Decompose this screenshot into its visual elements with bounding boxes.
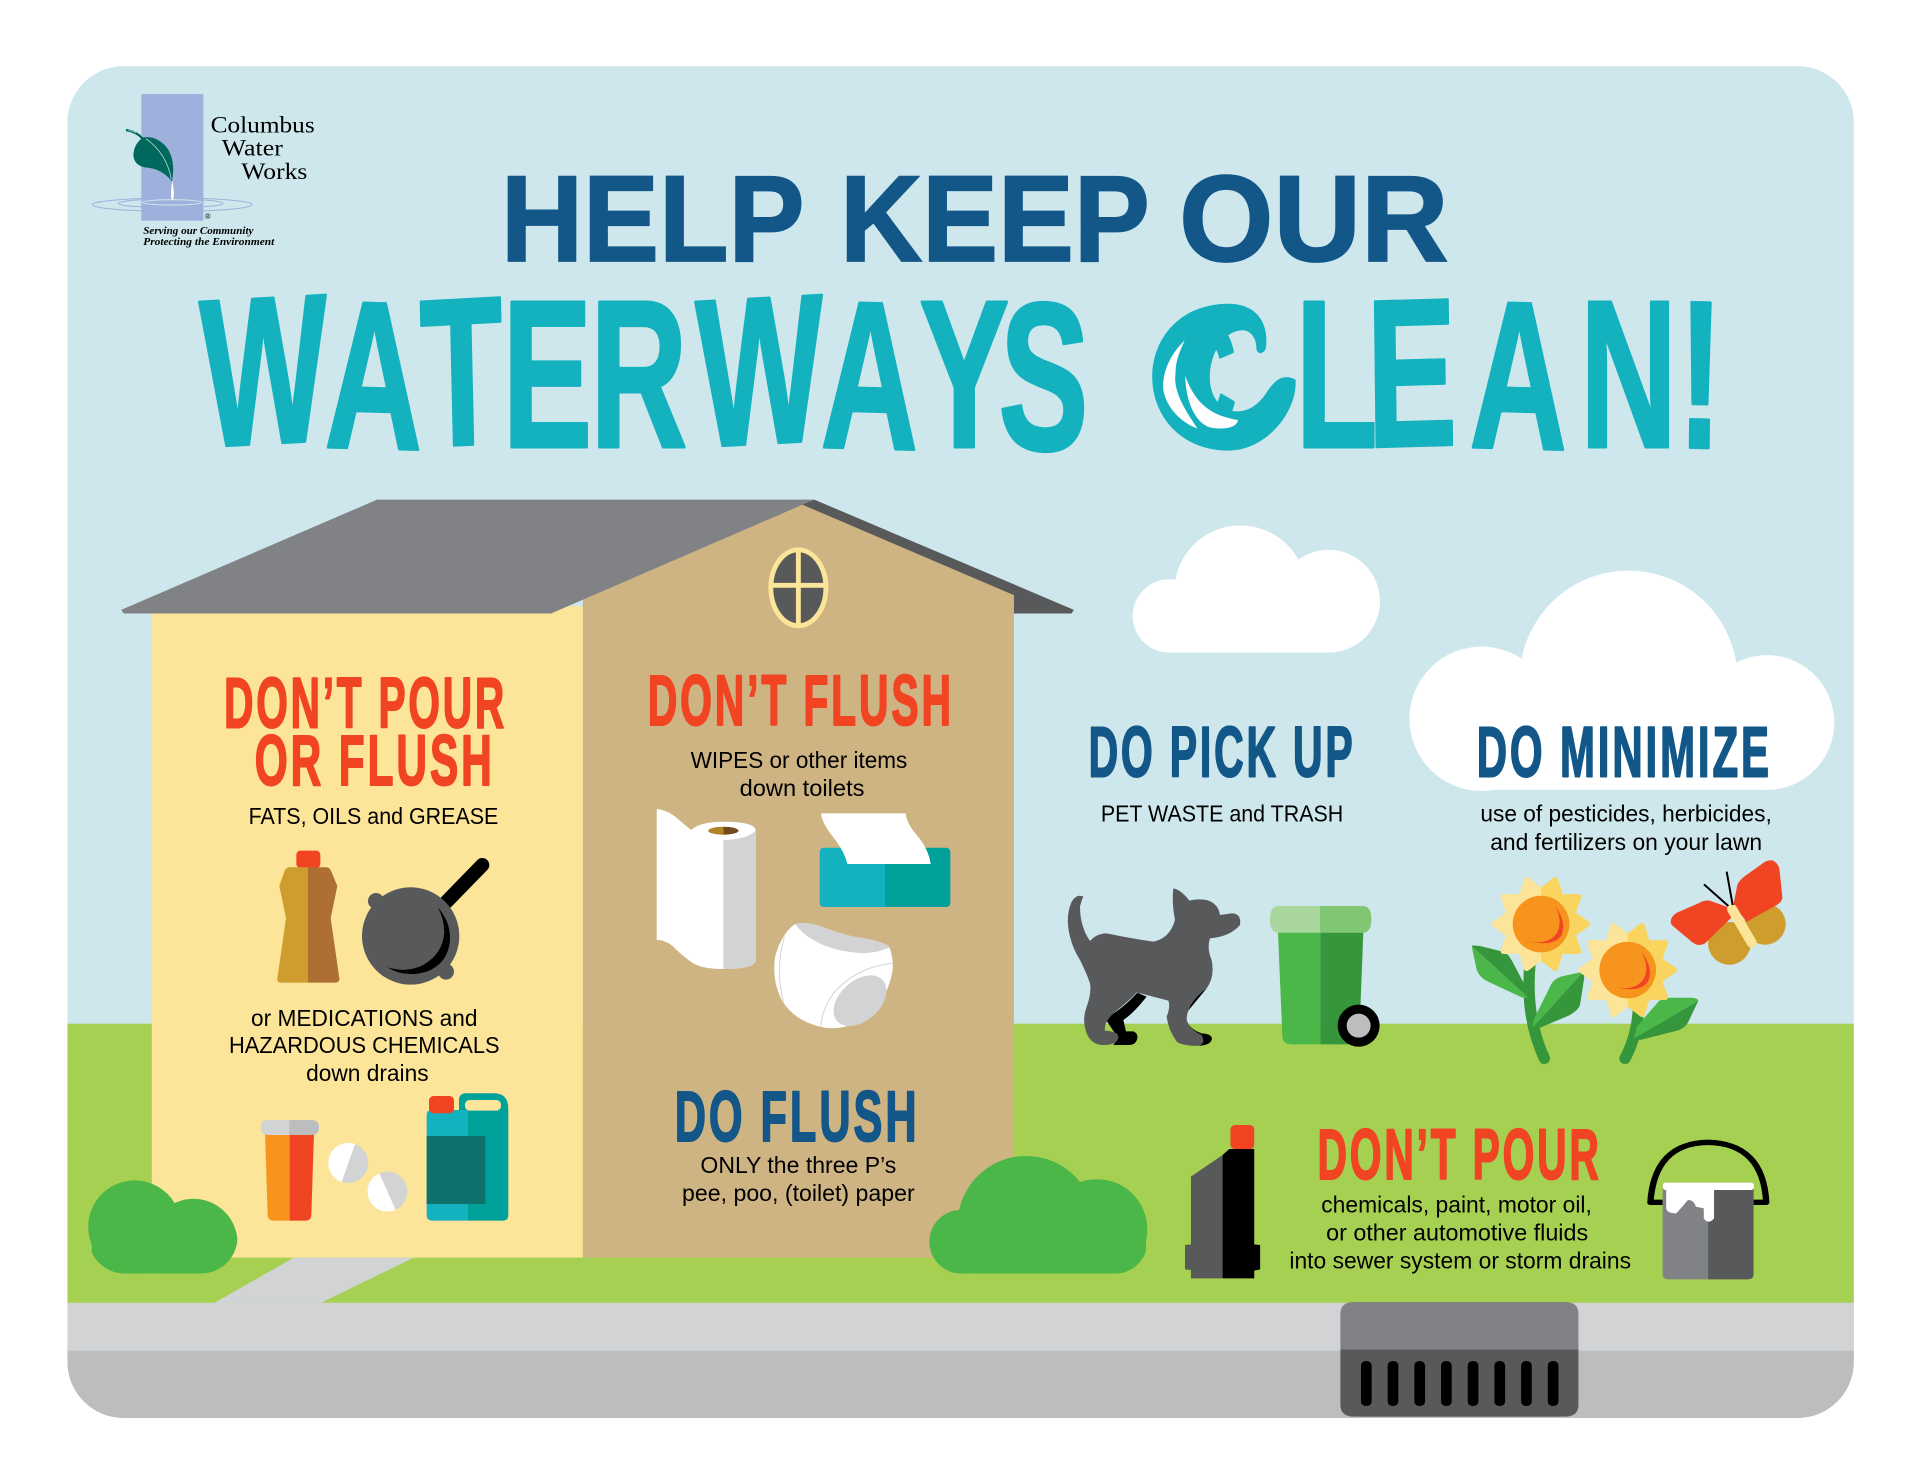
icon: flower right xyxy=(1581,926,1698,1058)
heading: or flush: OR FLUSH xyxy=(255,722,495,801)
text: pesticides: and fertilizers on your lawn xyxy=(1490,829,1762,855)
text: wipes: WIPES or other items xyxy=(691,747,907,773)
title line 2 xyxy=(198,251,1724,497)
roof xyxy=(121,500,814,613)
icon: flower left xyxy=(1472,880,1588,1058)
icons: flowers and butterfly xyxy=(1472,860,1786,1058)
title line 2: C xyxy=(1163,289,1237,467)
heading: don't pour or flush: DON’T POUR xyxy=(224,664,507,743)
title line 2: LEAN! xyxy=(1295,255,1724,495)
attic window xyxy=(771,550,826,626)
logo: Columbus Water Works xyxy=(92,94,315,248)
logo: Columbus Water Works: Works xyxy=(241,159,307,185)
logo: Columbus Water Works: Columbus xyxy=(211,112,315,138)
text: medications: down drains xyxy=(306,1060,429,1086)
text: three P's xyxy=(682,1152,915,1206)
icon: pill bottle xyxy=(261,1120,319,1221)
text: fats, oils and grease: FATS, OILS and GREASE xyxy=(249,803,498,829)
text: wipes xyxy=(691,747,907,801)
icon: frying pan xyxy=(362,865,482,985)
icon: tissue box xyxy=(820,813,950,907)
title line 2: WATERWAYS xyxy=(198,251,1092,497)
text: three P's: ONLY the three P’s xyxy=(700,1152,896,1178)
walkway xyxy=(214,1258,414,1303)
text: pet waste: PET WASTE and TRASH xyxy=(1101,801,1343,827)
icon: dog xyxy=(1068,888,1240,1046)
icons: paper towel, tissue box, diaper xyxy=(657,809,950,1036)
heading: don't flush: DON’T FLUSH xyxy=(648,662,954,741)
icon: pills xyxy=(328,1143,407,1212)
icon: motor oil bottle xyxy=(1185,1125,1260,1278)
icon: chemical jug xyxy=(427,1093,508,1221)
icon: butterfly xyxy=(1671,860,1786,965)
text: chemicals: chemicals, paint, motor oil, xyxy=(1321,1191,1592,1217)
logo: Columbus Water Works: Protecting the Environment xyxy=(143,237,275,248)
heading: do flush: DO FLUSH xyxy=(675,1078,920,1157)
icon: wheeled bin xyxy=(1270,906,1380,1047)
house xyxy=(121,500,1074,1258)
icons: grease bottle, pan, pills, chemical jug xyxy=(261,851,508,1221)
icon: diaper xyxy=(774,923,896,1036)
text: pesticides: use of pesticides, herbicides, xyxy=(1480,801,1772,827)
icon: dish soap bottle xyxy=(277,851,339,983)
icon: paint can xyxy=(1650,1142,1766,1279)
clouds xyxy=(1133,525,1834,791)
logo: Columbus Water Works: Serving our Community xyxy=(143,226,254,237)
text: medications: or MEDICATIONS and xyxy=(251,1005,478,1031)
house right wall xyxy=(583,500,1014,1258)
icons: oil bottle, paint can, storm drain xyxy=(1185,1125,1766,1417)
title line 1 xyxy=(501,150,1449,287)
logo: Columbus Water Works: Water xyxy=(222,136,283,162)
bush right xyxy=(929,1156,1148,1274)
text: three P's: pee, poo, (toilet) paper xyxy=(682,1180,915,1206)
bush left xyxy=(88,1180,238,1274)
roof shadow side xyxy=(802,500,1074,613)
logo: Columbus Water Works: ® xyxy=(204,211,211,221)
title line 1: OUR xyxy=(1179,150,1449,287)
title line 1: KEEP xyxy=(840,150,1150,287)
icons: dog and bin xyxy=(1068,888,1380,1047)
icon: storm drain xyxy=(1340,1302,1578,1417)
text: wipes: down toilets xyxy=(740,775,864,801)
heading: do pick up: DO PICK UP xyxy=(1089,713,1356,792)
icon: paper towel roll xyxy=(657,809,756,969)
text: chemicals: into sewer system or storm drains xyxy=(1289,1248,1631,1274)
text: chemicals xyxy=(1289,1191,1631,1274)
text: chemicals: or other automotive fluids xyxy=(1326,1219,1588,1245)
wave swoosh on the C xyxy=(1152,304,1296,451)
text: pesticides xyxy=(1480,801,1772,855)
text: medications: HAZARDOUS CHEMICALS xyxy=(229,1032,500,1058)
title line 1: HELP xyxy=(501,150,804,287)
house left wall xyxy=(152,606,583,1258)
text: medications xyxy=(229,1005,500,1086)
heading: don't pour bottom: DON’T POUR xyxy=(1318,1116,1602,1195)
